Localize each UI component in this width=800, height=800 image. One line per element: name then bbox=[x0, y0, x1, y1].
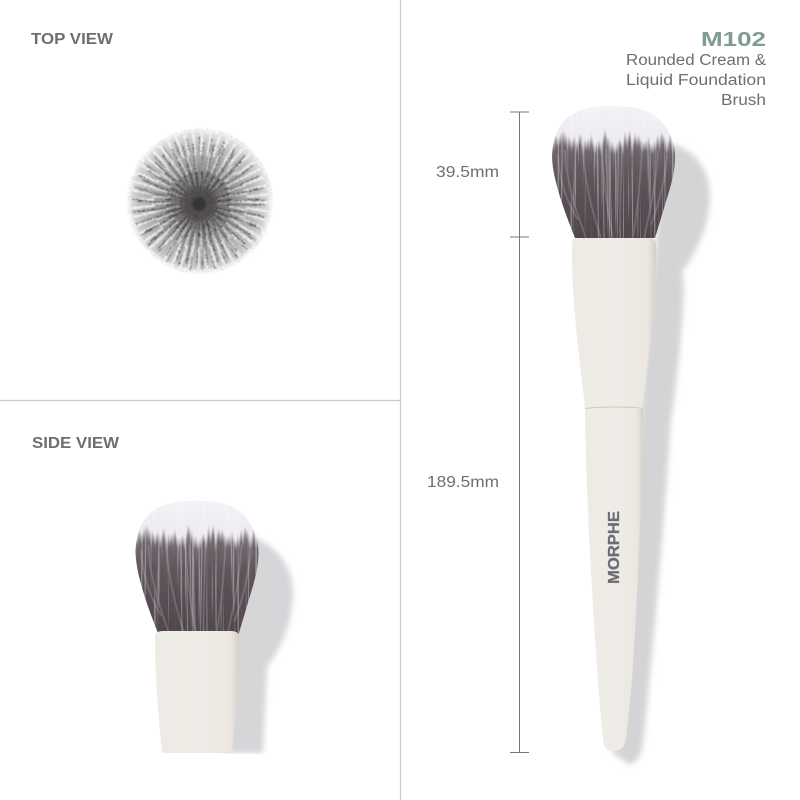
panel dividers bbox=[0, 0, 400, 800]
bristle length label: 39.5mm bbox=[436, 164, 499, 181]
dimension lines bbox=[427, 112, 529, 752]
icon: full brush bbox=[535, 80, 710, 764]
side view handle bbox=[155, 631, 239, 753]
product code: M102 bbox=[701, 29, 766, 51]
ferrule handle section bbox=[572, 238, 656, 408]
product title block bbox=[626, 29, 767, 109]
icon: brush side view bbox=[118, 474, 293, 768]
heading: top view: TOP VIEW bbox=[31, 31, 113, 48]
product name: Rounded Cream & bbox=[626, 52, 767, 69]
lower handle section bbox=[585, 408, 643, 751]
handle logo: MORPHE bbox=[606, 511, 623, 584]
product name: Brush bbox=[721, 92, 766, 109]
handle seam bbox=[585, 407, 643, 408]
icon: brush top view bristles bbox=[130, 131, 270, 271]
side view shadow bbox=[225, 535, 293, 753]
heading: side view: SIDE VIEW bbox=[32, 435, 119, 452]
full brush shadow bbox=[612, 143, 710, 764]
full brush bristles bbox=[535, 80, 695, 250]
product name bbox=[626, 52, 767, 109]
handle length label: 189.5mm bbox=[427, 474, 499, 491]
product name: Liquid Foundation bbox=[626, 72, 766, 89]
side view bristles bbox=[118, 474, 278, 647]
